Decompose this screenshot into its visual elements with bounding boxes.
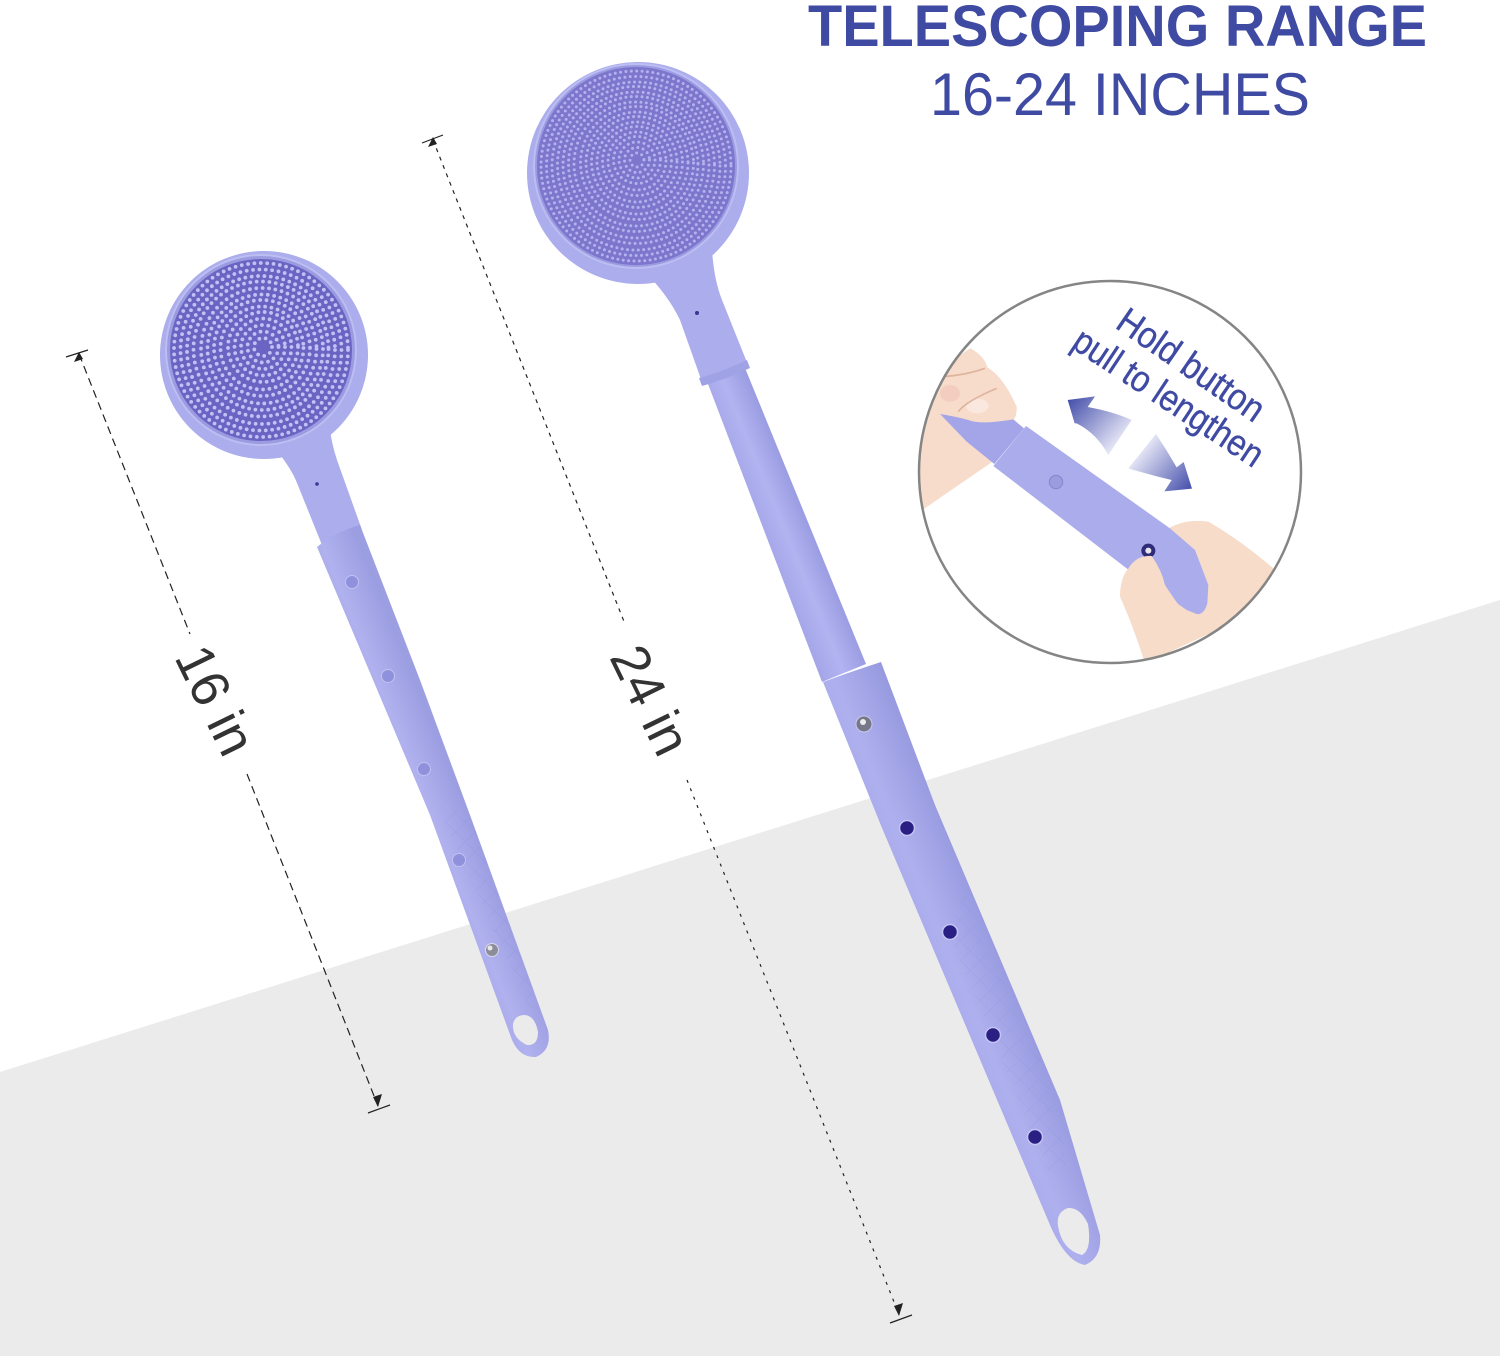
title <box>808 0 1427 128</box>
24 in label: 24 in <box>598 636 702 765</box>
24 inch dimension line <box>422 135 912 1323</box>
long brush neck and inner tube <box>645 250 866 682</box>
callout text: hold button: Hold button <box>1109 300 1273 430</box>
icon: right hand <box>1120 521 1273 663</box>
16 inch dimension line <box>66 350 390 1113</box>
callout: hold button and pull to lengthen <box>913 281 1301 663</box>
callout text: pull to lengthen: pull to lengthen <box>1066 319 1272 475</box>
long brush bristle head <box>527 62 749 284</box>
handle sleeve <box>993 426 1208 614</box>
arrow: lengthen direction <box>1128 434 1192 491</box>
icon: right thumb <box>1128 556 1178 604</box>
long brush at 24 inches <box>527 62 1100 1265</box>
short brush handle <box>278 430 550 1057</box>
arrow: shorten direction <box>1068 396 1132 455</box>
long brush outer sleeve <box>823 662 1100 1265</box>
16 in label: 16 in <box>163 636 267 765</box>
short brush at 16 inches <box>160 251 550 1057</box>
title: 16-24 INCHES <box>930 61 1310 128</box>
background grey floor band <box>0 600 1500 1356</box>
button hole <box>1049 475 1063 489</box>
metal button <box>1141 544 1155 558</box>
icon: left hand <box>913 348 1017 509</box>
short brush bristle head <box>160 251 368 459</box>
icon: left fingers <box>940 368 997 413</box>
handle inner segment <box>940 414 1024 464</box>
